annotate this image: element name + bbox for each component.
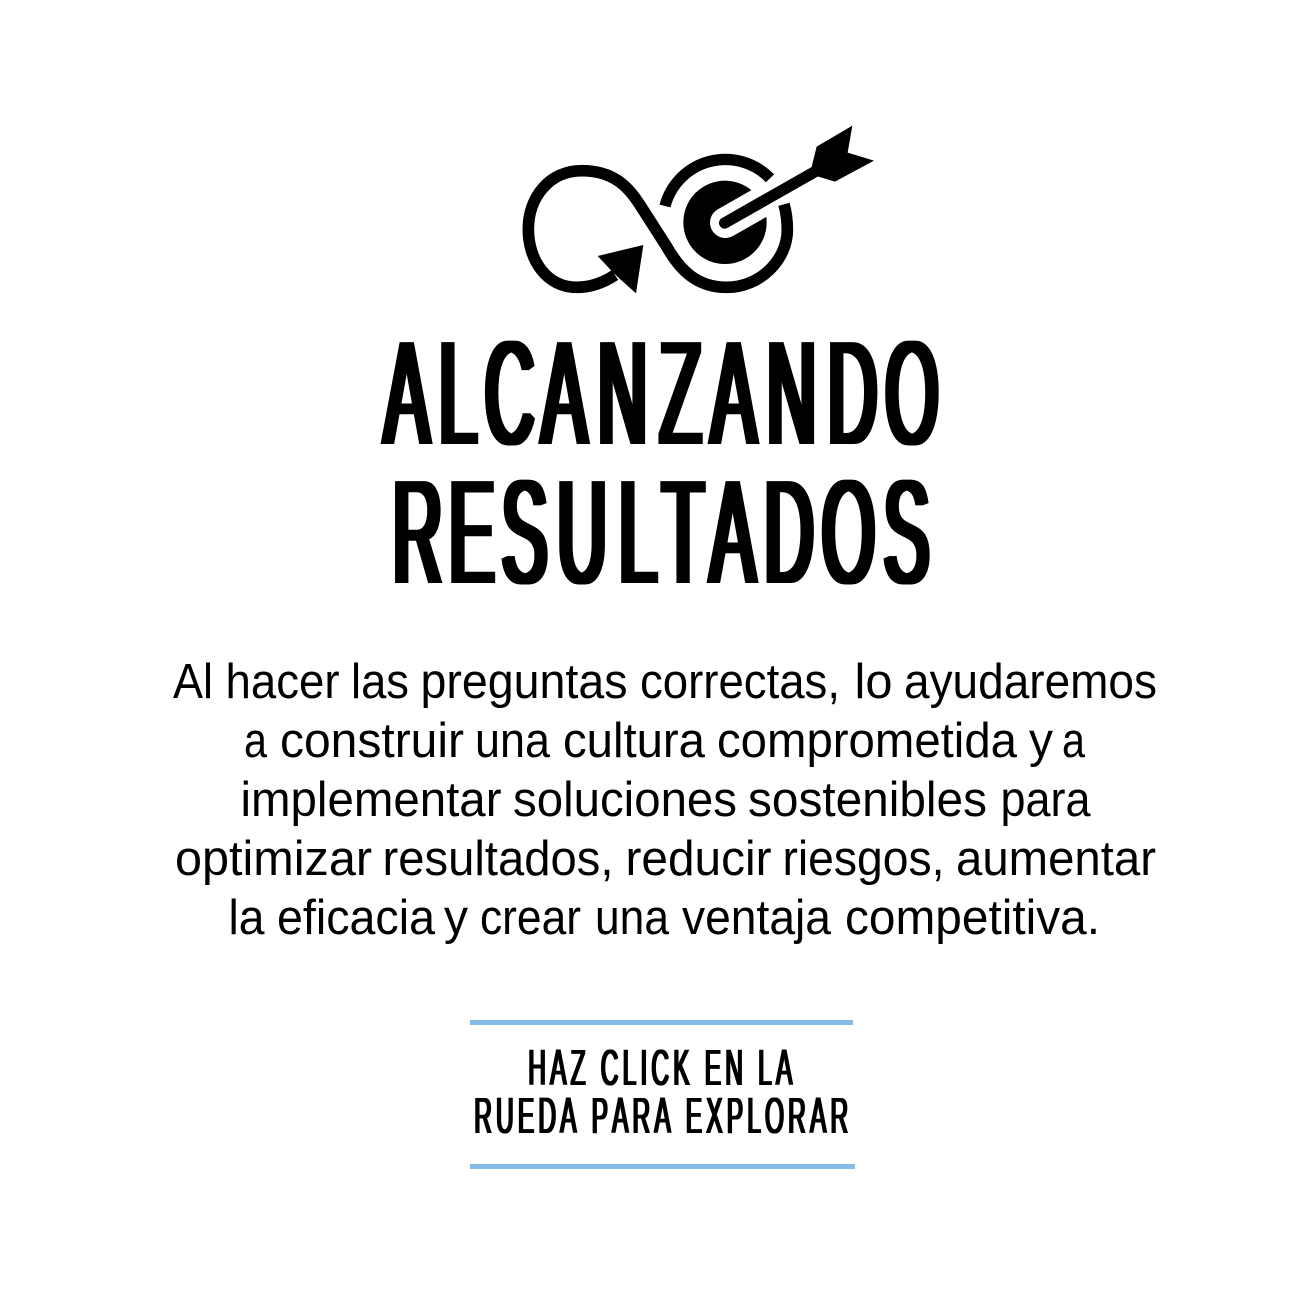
body paragraph: riesgos, <box>782 832 944 886</box>
title <box>384 312 938 615</box>
body paragraph: Al <box>173 655 213 709</box>
body paragraph: eficacia <box>277 891 436 945</box>
body paragraph: optimizar <box>175 832 372 886</box>
white halo around arrow shaft <box>725 188 787 223</box>
call to action text: RUEDA PARA EXPLORAR <box>474 1088 848 1144</box>
call to action text <box>474 1040 848 1144</box>
call to action text: HAZ CLICK EN LA <box>528 1040 792 1096</box>
body paragraph: a <box>1062 714 1086 768</box>
body paragraph: preguntas <box>420 655 628 709</box>
body paragraph: reducir <box>626 832 772 886</box>
body paragraph: soluciones <box>513 773 737 827</box>
icon: infinity loop with target and arrow <box>528 126 874 293</box>
body paragraph <box>173 655 1157 945</box>
body paragraph: comprometida <box>717 714 1018 768</box>
body paragraph: cultura <box>563 714 706 768</box>
loop arrowhead <box>598 245 643 293</box>
body paragraph: implementar <box>240 773 502 827</box>
body paragraph: y <box>444 891 468 945</box>
body paragraph: aumentar <box>956 832 1156 886</box>
body paragraph: competitiva. <box>845 891 1100 945</box>
body paragraph: correctas, <box>640 655 840 709</box>
title: RESULTADOS <box>393 451 929 615</box>
bottom rule <box>470 1164 855 1169</box>
body paragraph: sostenibles <box>748 773 987 827</box>
body paragraph: la <box>228 891 265 945</box>
arrow fletching <box>812 126 874 182</box>
body paragraph: ventaja <box>682 891 832 945</box>
body paragraph: resultados, <box>382 832 614 886</box>
arrow shaft <box>725 171 817 223</box>
title: ALCANZANDO <box>384 312 938 476</box>
body paragraph: una <box>595 891 670 945</box>
body paragraph: construir <box>280 714 464 768</box>
bullseye disc <box>683 181 767 264</box>
body paragraph: ayudaremos <box>904 655 1157 709</box>
body paragraph: hacer <box>226 655 340 709</box>
body paragraph: y <box>1029 714 1053 768</box>
body paragraph: las <box>351 655 409 709</box>
body paragraph: crear <box>480 891 581 945</box>
body paragraph: lo <box>854 655 892 709</box>
body paragraph: para <box>1000 773 1091 827</box>
call to action <box>470 1020 855 1169</box>
top rule <box>470 1020 853 1025</box>
body paragraph: a <box>244 714 268 768</box>
target outer arc <box>665 159 770 206</box>
infinity curve <box>528 171 787 287</box>
body paragraph: una <box>475 714 551 768</box>
